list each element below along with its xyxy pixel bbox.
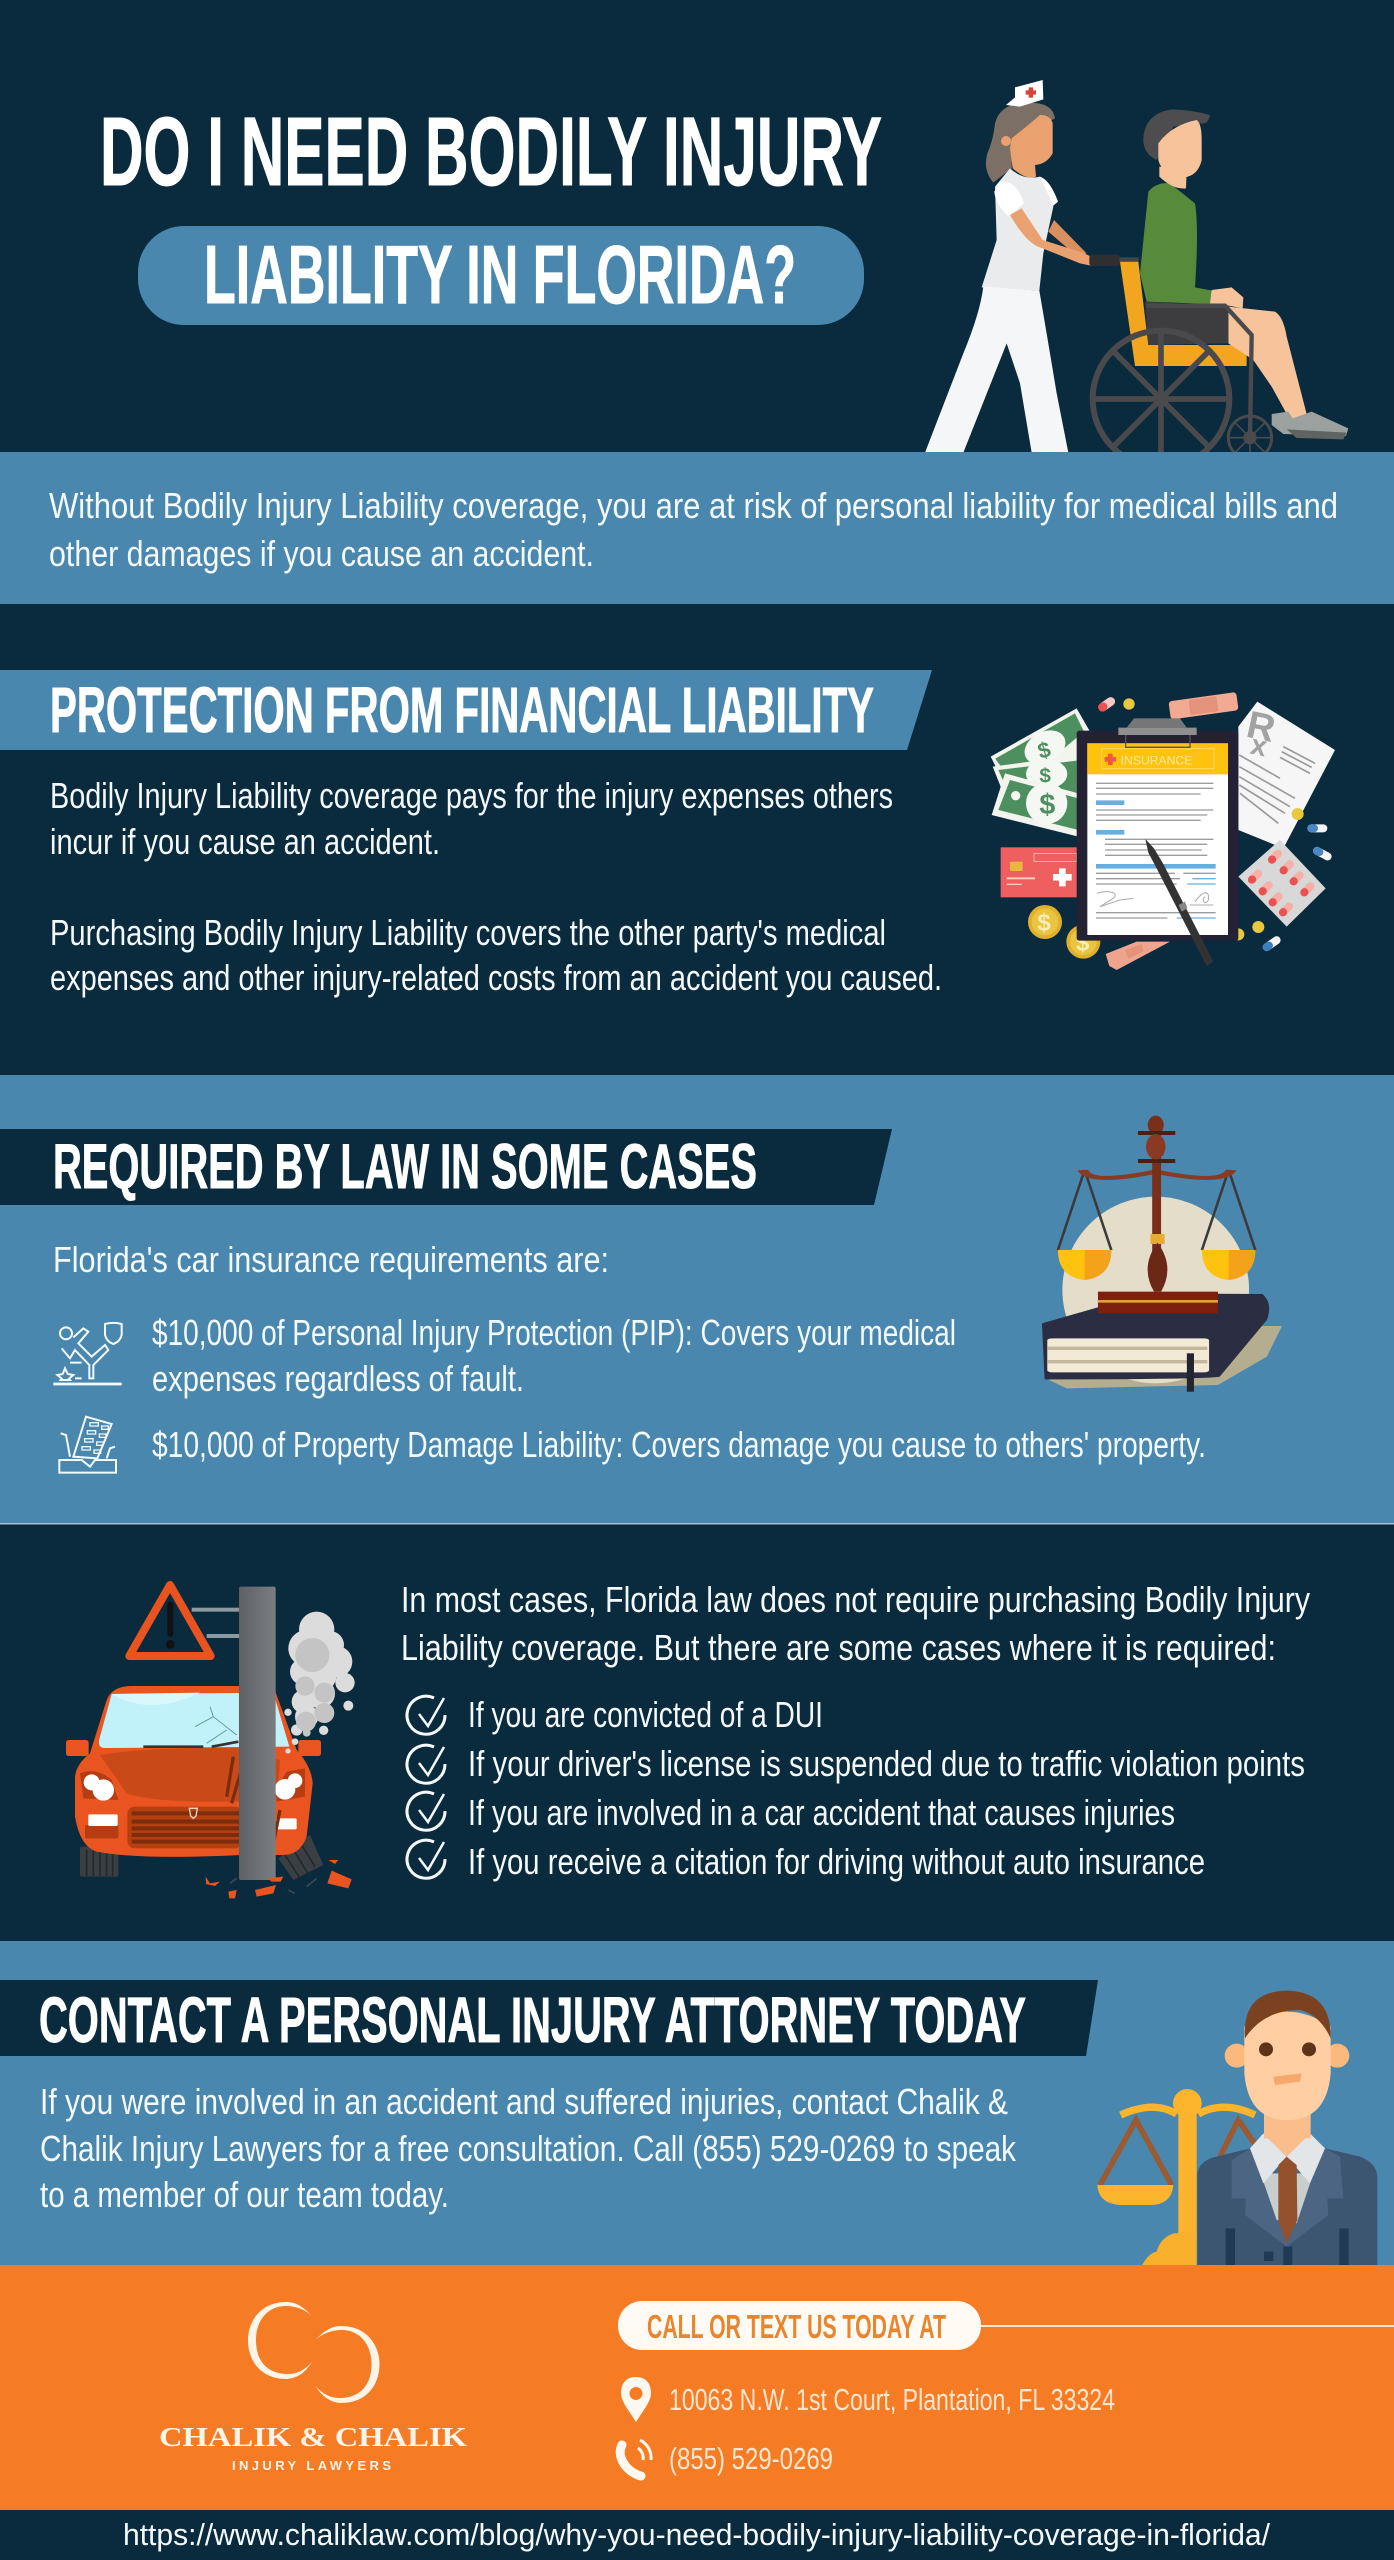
checklist: [407, 1694, 1305, 1882]
contact text: Chalik Injury Lawyers for a free consultation. Call (855) 529-0269 to speak: [40, 2128, 1017, 2169]
contact text: [40, 2081, 1017, 2215]
title line 1: DO I NEED BODILY INJURY: [100, 97, 882, 206]
illustration: insurance clipboard with money and pills: x: [1248, 729, 1270, 763]
illustration: car crashed into pole: [66, 1585, 355, 1898]
section text: [401, 1579, 1310, 1668]
icon: map pin: [621, 2377, 651, 2422]
check item 3: If you are involved in a car accident that causes injuries: [468, 1792, 1175, 1833]
call pill: CALL OR TEXT US TODAY AT: [647, 2308, 946, 2345]
intro text: [49, 485, 1338, 574]
icon: phone: [620, 2440, 651, 2476]
panel: contact attorney: [0, 1941, 1394, 2267]
contact text: to a member of our team today.: [40, 2174, 449, 2215]
logo: [159, 2302, 467, 2473]
illustration: attorney with gold scales: [1097, 1991, 1377, 2267]
icon: damaged building: [59, 1417, 116, 1473]
URL text: https://www.chaliklaw.com/blog/why-you-need-bodily-injury-liability-coverage-in-florida/: [123, 2517, 1270, 2552]
illustration: insurance clipboard with money and pills: $: [1037, 910, 1051, 937]
panel: intro band: [0, 452, 1394, 604]
panel: header: [104, 80, 1348, 452]
contact text: If you were involved in an accident and suffered injuries, contact Chalik &: [40, 2081, 1008, 2122]
heading banner: [0, 1129, 892, 1205]
icon: falling person with shield: [53, 1323, 122, 1384]
panel: source URL: [0, 2510, 1394, 2560]
logo: INJURY LAWYERS: [232, 2458, 391, 2473]
phone row: [620, 2440, 833, 2476]
PIP requirement text: [152, 1312, 956, 1399]
illustration: insurance clipboard with money and pills: $: [1076, 929, 1089, 956]
illustration: scales of justice on law book: [1042, 1116, 1282, 1392]
body text: Purchasing Bodily Injury Liability covers the other party's medical: [50, 912, 886, 953]
panel: when coverage is required: [0, 1525, 1394, 1941]
address row: 10063 N.W. 1st Court, Plantation, FL 33324: [669, 2382, 1115, 2417]
call pill: [618, 2301, 1394, 2350]
intro text: other damages if you cause an accident.: [49, 533, 594, 574]
illustration: nurse pushing patient in wheelchair: [925, 80, 1348, 467]
body text: [50, 775, 942, 998]
divider: [0, 1523, 1394, 1524]
body text: incur if you cause an accident.: [50, 821, 440, 862]
illustration: insurance clipboard with money and pills: R: [1243, 703, 1279, 751]
illustration: insurance clipboard with money and pills: $: [1039, 765, 1051, 788]
title pill: [138, 226, 864, 325]
PIP requirement text: expenses regardless of fault.: [152, 1358, 524, 1399]
requirements intro: Florida's car insurance requirements are:: [53, 1239, 609, 1280]
panel: required by law: [0, 1075, 1394, 1524]
panel: protection from financial liability: [0, 604, 1394, 1075]
illustration: insurance clipboard with money and pills: [991, 692, 1335, 970]
phone row: (855) 529-0269: [669, 2441, 833, 2476]
title pill: LIABILITY IN FLORIDA?: [204, 228, 796, 321]
logo monogram: [248, 2302, 380, 2403]
check item 4: If you receive a citation for driving without auto insurance: [468, 1841, 1205, 1882]
body text: Bodily Injury Liability coverage pays for the injury expenses others: [50, 775, 893, 816]
illustration: insurance clipboard with money and pills: INSURANCE: [1121, 754, 1192, 768]
check item 1: [407, 1694, 823, 1735]
PIP requirement text: $10,000 of Personal Injury Protection (PIP): Covers your medical: [152, 1312, 956, 1353]
address row: [621, 2377, 1115, 2422]
panel: footer contact band: [0, 2265, 1394, 2510]
illustration: insurance clipboard with money and pills: $: [1035, 736, 1053, 764]
illustration: insurance clipboard with money and pills: $: [1039, 789, 1055, 821]
check item 1: If you are convicted of a DUI: [468, 1694, 823, 1735]
logo: CHALIK & CHALIK: [159, 2422, 467, 2452]
heading banner: PROTECTION FROM FINANCIAL LIABILITY: [50, 674, 874, 746]
heading banner: [0, 670, 932, 750]
body text: expenses and other injury-related costs from an accident you caused.: [50, 957, 942, 998]
heading banner: REQUIRED BY LAW IN SOME CASES: [53, 1132, 757, 1202]
